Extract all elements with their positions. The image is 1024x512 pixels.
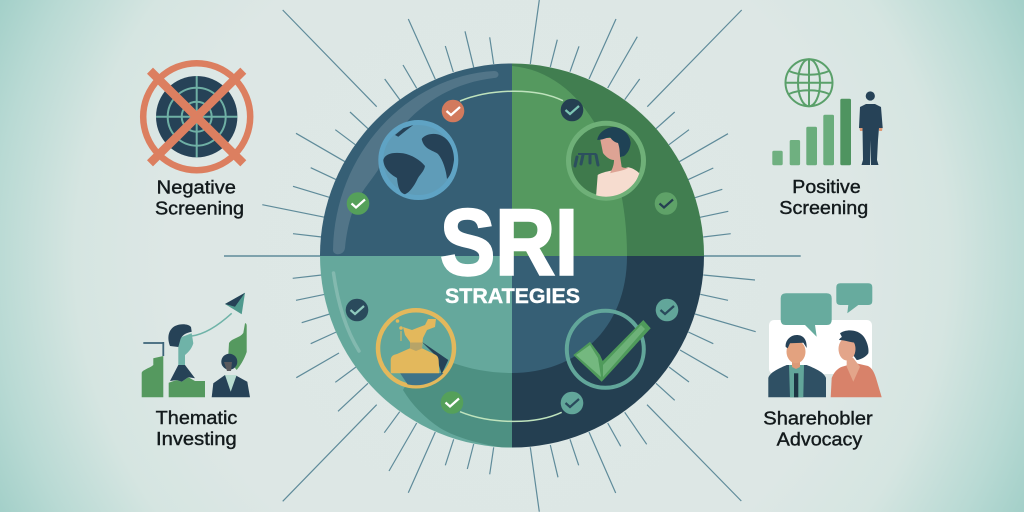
quadrant: top left, blue bbox=[320, 63, 512, 256]
label: shareholder advocacy: Advocacy bbox=[777, 430, 862, 450]
icon: yellow bust emblem bbox=[378, 310, 454, 388]
label: positive screening: Positive bbox=[792, 177, 861, 197]
label: negative screening: Negative bbox=[157, 177, 236, 197]
icon: negative screening target bbox=[143, 63, 250, 170]
check badge: green bottom bbox=[441, 391, 463, 414]
icon: thematic investing figures and arrow bbox=[142, 293, 250, 397]
quadrant: bottom left, teal bbox=[320, 256, 512, 449]
label: shareholder advocacy bbox=[763, 408, 873, 450]
check badge: teal right bbox=[656, 299, 678, 321]
central SRI disc bbox=[320, 63, 704, 449]
label: thematic investing bbox=[156, 408, 237, 449]
label: positive screening: Screening bbox=[779, 198, 868, 218]
connector arc: top bbox=[460, 91, 563, 101]
quadrant: bottom right, navy bbox=[512, 256, 704, 449]
check badge: orange bbox=[442, 100, 464, 122]
connector arc: bottom bbox=[460, 412, 562, 421]
check badge: teal bottom bbox=[561, 392, 583, 414]
quadrant: top right, green bbox=[512, 63, 704, 256]
subtitle: STRATEGIES bbox=[445, 285, 580, 308]
label: thematic investing: Investing bbox=[156, 429, 237, 449]
check badge: green left bbox=[347, 192, 369, 215]
radiating lines bbox=[224, 0, 801, 512]
icon: globe emblem bbox=[381, 122, 456, 198]
icon: large green check emblem bbox=[567, 311, 651, 388]
icon: portrait emblem bbox=[568, 123, 644, 198]
icon: positive screening globe, bars and person bbox=[772, 59, 883, 165]
label: negative screening: Screening bbox=[155, 198, 244, 218]
title: SRI bbox=[440, 190, 578, 294]
label: shareholder advocacy: Sharehobler bbox=[763, 408, 873, 428]
check badge: navy top bbox=[561, 99, 583, 121]
label: negative screening bbox=[155, 177, 244, 218]
label: positive screening bbox=[779, 177, 868, 218]
icon: shareholder advocacy people and speech bubbles bbox=[768, 283, 882, 397]
label: thematic investing: Thematic bbox=[156, 408, 237, 428]
check badge: navy left bbox=[346, 299, 368, 321]
check badge: green right bbox=[655, 192, 677, 215]
